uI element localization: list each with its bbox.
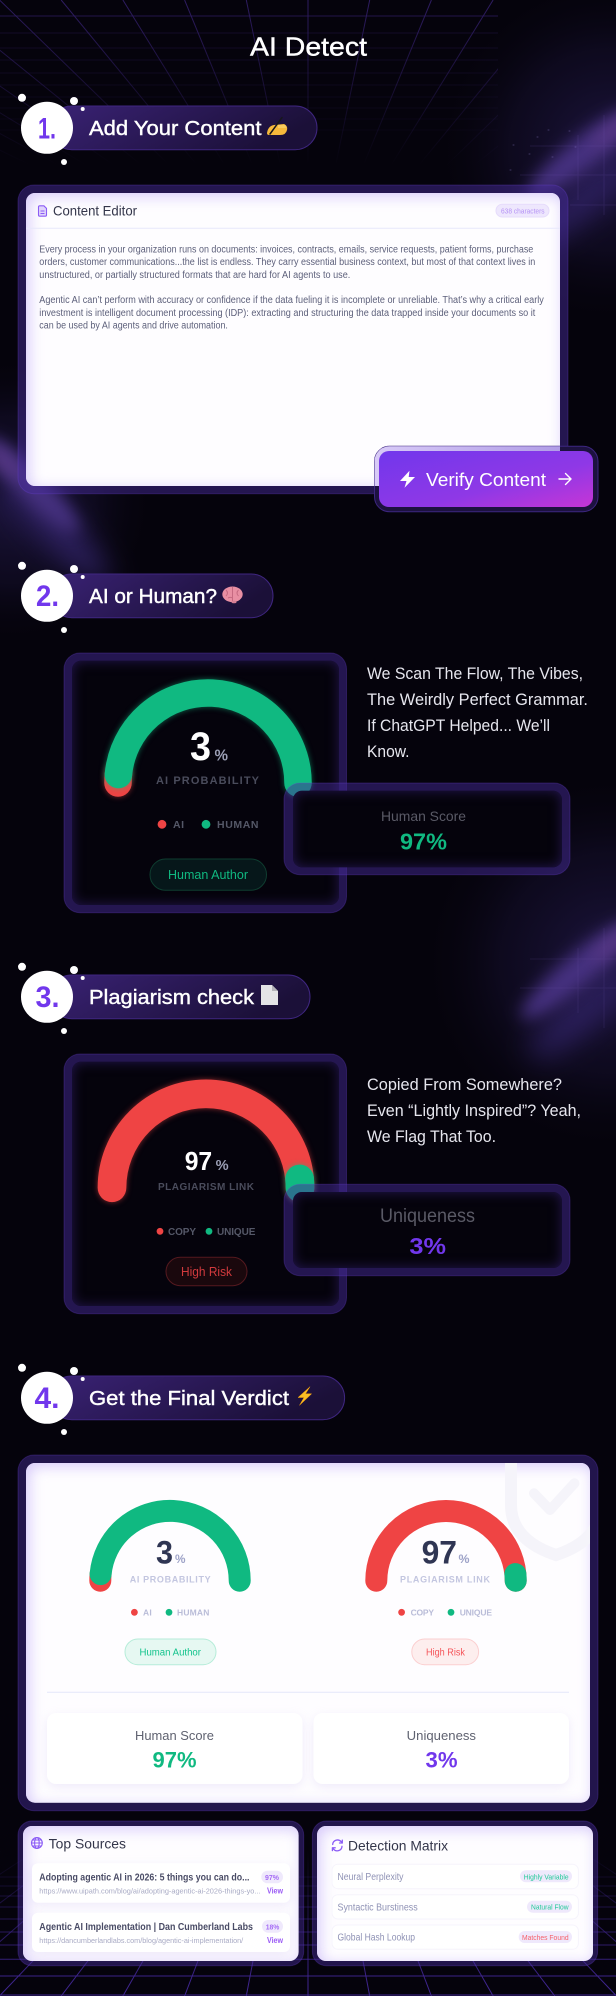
legend [131, 1608, 209, 1618]
stat card: uniqueness: 3% [426, 1747, 458, 1772]
text: plagiarism description [367, 1076, 581, 1146]
gauge legend: UNIQUE [217, 1227, 256, 1238]
stat card: uniqueness [314, 1713, 569, 1784]
gauge card frame [64, 1054, 346, 1314]
background: bottom perspective grid [0, 1672, 616, 1996]
button face [379, 451, 593, 507]
icon: arrow [559, 474, 571, 484]
icon: page [261, 985, 278, 1005]
step 3 number badge [21, 971, 73, 1023]
source item 2: 18% [266, 1922, 280, 1931]
step 2 pill [50, 574, 273, 618]
stat card: human score: Human Score [135, 1728, 214, 1743]
legend: AI [143, 1608, 152, 1618]
gauge card interior [72, 1062, 339, 1306]
button frame over sheet [374, 446, 560, 486]
matrix heading: Detection Matrix [348, 1838, 448, 1854]
icon: lightning [298, 1387, 312, 1405]
verdict frame [18, 1455, 598, 1811]
panel: AI probability gauge [64, 653, 346, 913]
panel: top sources [18, 1821, 304, 1966]
matrix row: neural perplexity [332, 1864, 578, 1889]
gauge caption: AI PROBABILITY [156, 775, 260, 787]
step 3 heading [18, 963, 310, 1034]
value: % [458, 1552, 470, 1566]
step 1 label: Add Your Content [89, 118, 262, 140]
gauge value [190, 725, 228, 769]
gauge legend: COPY [168, 1227, 196, 1238]
panel: human score [284, 783, 570, 875]
step 2 number badge [21, 570, 73, 622]
legend: HUMAN [177, 1608, 209, 1618]
score card interior [293, 791, 562, 867]
matrix row: syntactic burstiness: Natural Flow [531, 1903, 569, 1912]
source item 2: https://dancumberlandlabs.com/blog/agentic-ai-implementation/ [39, 1936, 244, 1945]
step 4 number badge: 4. [34, 1382, 60, 1415]
gauge card frame [64, 653, 346, 913]
score card interior [293, 1192, 562, 1268]
button: verify content [374, 446, 598, 512]
source item 1 [32, 1863, 290, 1903]
gauge value: % [214, 748, 228, 764]
text: AI detection description: Know. [367, 743, 410, 761]
gauge: plagiarism link light [376, 1511, 516, 1665]
step 4 number badge [21, 1372, 73, 1424]
character count badge [496, 204, 549, 217]
gauge: 97 percent copy [112, 1094, 300, 1188]
score card frame [284, 1184, 570, 1276]
gauge: 3 percent AI [118, 693, 298, 783]
background: light streak right middle [425, 778, 616, 1148]
step 2 label: AI or Human? [89, 586, 217, 608]
source item 1: 97% [265, 1873, 279, 1882]
verdict sheet [26, 1463, 590, 1803]
background: light streak upper right [440, 0, 616, 320]
gauge value: 97 [185, 1146, 212, 1176]
editor body text: orders, customer communications...the list is endless. They carry essential business context, but most of that context lives in [39, 257, 535, 268]
source item 2 [32, 1913, 290, 1952]
editor body text [39, 244, 544, 332]
step 2 number badge: 2. [36, 580, 59, 613]
stat card: human score [47, 1713, 302, 1784]
text: AI detection description: The Weirdly Perfect Grammar. [367, 691, 588, 709]
legend: COPY [411, 1608, 434, 1618]
icon: writing hand [267, 118, 287, 135]
score card frame [284, 783, 570, 875]
arc [376, 1511, 516, 1581]
matrix row: global hash lookup: Matches Found [522, 1933, 569, 1942]
arc [100, 1511, 240, 1581]
matrix row: syntactic burstiness [332, 1895, 578, 1919]
stat card: uniqueness: Uniqueness [407, 1728, 477, 1743]
icon: document [38, 206, 46, 216]
source item 2: View [267, 1936, 284, 1945]
gauge legend: AI [173, 819, 184, 831]
source item 2: Agentic AI Implementation | Dan Cumberland Labs [39, 1922, 253, 1933]
button frame [374, 446, 598, 512]
step 3 decorative dots [18, 963, 85, 1034]
caption: PLAGIARISM LINK [400, 1574, 490, 1584]
score value: 97% [400, 828, 447, 854]
score value: 3% [409, 1233, 446, 1259]
stat card: human score: 97% [152, 1747, 196, 1772]
editor body text: can be used by AI agents and drive automation. [39, 320, 228, 332]
background: top perspective grid [0, 0, 498, 150]
text: AI detection description [367, 665, 588, 761]
value: % [175, 1552, 186, 1566]
text: AI detection description: We Scan The Flow, The Vibes, [367, 665, 583, 683]
step 3 pill [50, 975, 310, 1019]
matrix row: global hash lookup [332, 1925, 578, 1949]
editor body text: unstructured, or partially structured formats that are hard for AI agents to use. [39, 270, 350, 281]
sources heading: Top Sources [49, 1836, 126, 1852]
step 4 label: Get the Final Verdict [89, 1388, 289, 1410]
editor frame [18, 185, 568, 494]
step 1 decorative dots [18, 94, 85, 165]
step 3 label: Plagiarism check [89, 987, 255, 1009]
sources frame [18, 1821, 304, 1966]
badge [412, 1639, 479, 1665]
step 1 number badge [21, 102, 73, 154]
icon: refresh [332, 1840, 342, 1851]
gauge value: % [216, 1158, 229, 1174]
gauge legend: HUMAN [217, 819, 258, 831]
gauge legend [157, 1227, 256, 1238]
legend: UNIQUE [460, 1608, 492, 1618]
gauge value: 3 [190, 725, 211, 769]
text: AI detection description: If ChatGPT Helped... We’ll [367, 717, 550, 735]
text: plagiarism description: Even “Lightly Inspired”? Yeah, [367, 1102, 581, 1120]
badge [125, 1639, 216, 1665]
score label: Human Score [381, 808, 466, 824]
matrix row: neural perplexity: Neural Perplexity [338, 1872, 404, 1883]
icon: brain [222, 586, 243, 603]
panel: plagiarism gauge [64, 1054, 346, 1314]
panel: uniqueness [284, 1184, 570, 1276]
verdict badge: human author [150, 859, 266, 890]
text: plagiarism description: Copied From Somewhere? [367, 1076, 562, 1094]
gauge caption: PLAGIARISM LINK [158, 1182, 255, 1193]
step 4 decorative dots [18, 1364, 85, 1435]
matrix row: global hash lookup: Global Hash Lookup [338, 1932, 415, 1943]
verdict badge: high risk: High Risk [181, 1265, 233, 1279]
icon: shield watermark [511, 1455, 601, 1555]
source item 1: Adopting agentic AI in 2026: 5 things you can do... [39, 1872, 250, 1884]
title: AI Detect [250, 32, 368, 62]
step 3 number badge: 3. [36, 981, 60, 1014]
step 2 decorative dots [18, 562, 85, 633]
value: 3 [156, 1534, 173, 1570]
verdict badge: human author: Human Author [168, 868, 248, 882]
icon: globe [32, 1838, 42, 1848]
matrix sheet [317, 1826, 593, 1961]
badge: High Risk [426, 1648, 466, 1658]
value: 97 [422, 1534, 457, 1570]
badge: Human Author [140, 1648, 202, 1658]
source item 1: https://www.uipath.com/blog/ai/adopting-agentic-ai-2026-things-yo... [39, 1887, 260, 1896]
score label: Uniqueness [380, 1206, 475, 1227]
panel: final verdict [18, 1455, 601, 1811]
step 2 heading [18, 562, 273, 633]
matrix row: syntactic burstiness: Syntactic Burstiness [338, 1902, 418, 1913]
value [156, 1534, 186, 1570]
legend [398, 1608, 492, 1618]
gauge: AI probability light [100, 1511, 240, 1665]
step 1 number badge: 1. [38, 112, 56, 146]
text: plagiarism description: We Flag That Too. [367, 1128, 496, 1146]
matrix row: neural perplexity: Highly Variable [524, 1872, 569, 1881]
verdict badge: high risk [166, 1257, 247, 1286]
character count badge: 638 characters [501, 206, 545, 215]
gauge card interior [72, 661, 339, 905]
step 1 pill [50, 106, 317, 150]
editor sheet [26, 193, 560, 486]
caption: AI PROBABILITY [130, 1574, 211, 1584]
panel: detection matrix [312, 1821, 598, 1966]
step 4 heading [18, 1364, 345, 1435]
editor heading: Content Editor [53, 202, 137, 218]
source item 1: View [267, 1887, 284, 1896]
editor body text: Agentic AI can’t perform with accuracy or confidence if the data fueling it is incomplete or unreliable. That’s why a critical early [39, 295, 544, 306]
icon: bolt [400, 471, 415, 488]
step 4 pill [50, 1376, 345, 1420]
background: light streak left [0, 360, 151, 640]
editor body text: Every process in your organization runs on documents: invoices, contracts, emails, service requests, patient forms, purchase [39, 244, 534, 256]
button label: Verify Content [426, 469, 546, 490]
step 1 heading [18, 94, 317, 165]
editor body text: investment is intelligent document processing (IDP): extracting and structuring the data trapped inside your documents so it [39, 308, 536, 319]
gauge legend [158, 819, 258, 831]
panel: content editor [18, 185, 568, 494]
matrix frame [312, 1821, 598, 1966]
gauge value [185, 1146, 229, 1176]
sources sheet [23, 1826, 299, 1961]
